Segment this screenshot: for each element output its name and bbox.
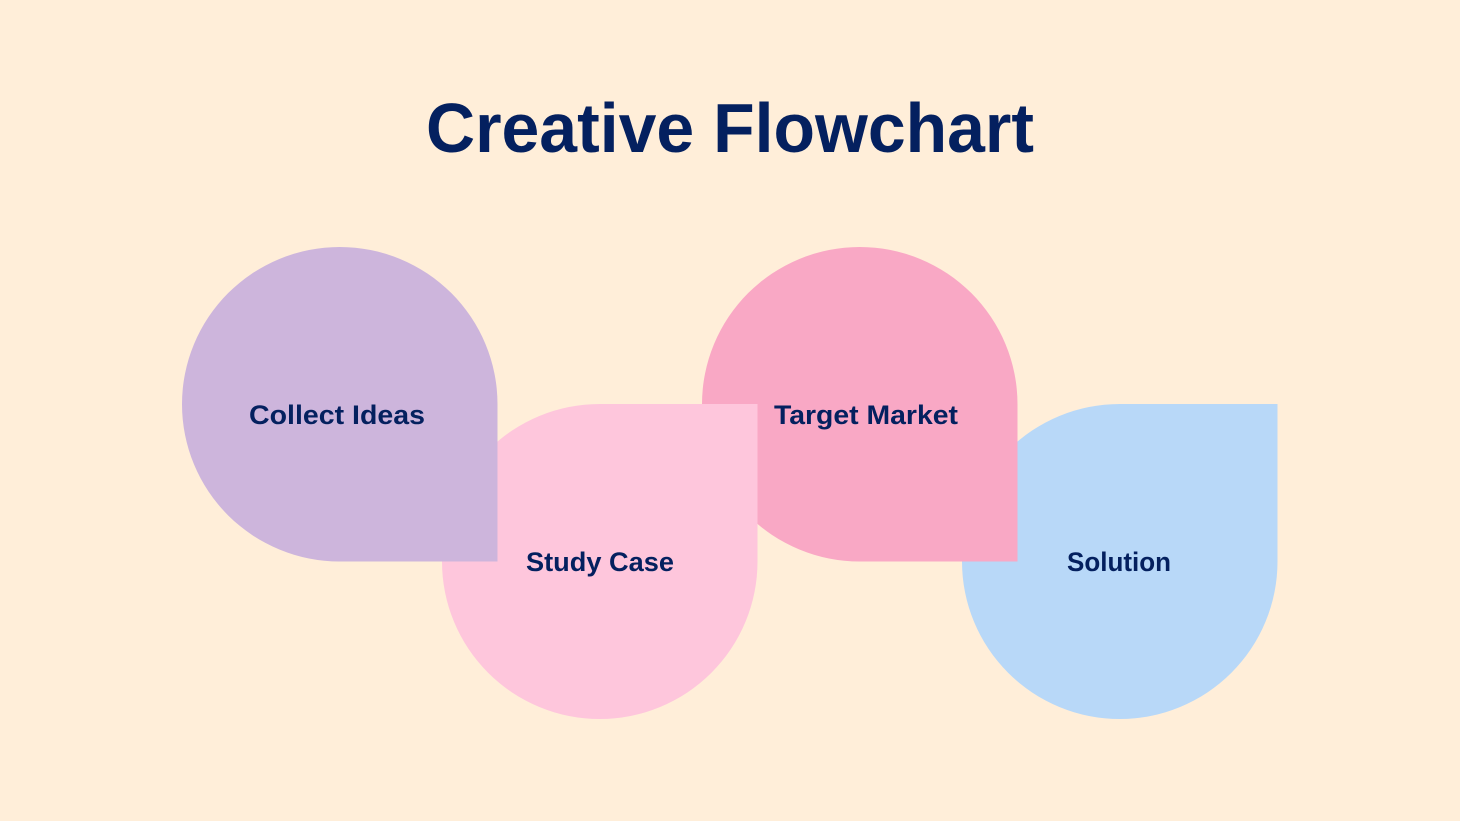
label: Solution: Solution (1067, 547, 1171, 577)
title: Creative Flowchart (426, 89, 1034, 167)
flowchart step shape: Target Market (702, 247, 1018, 562)
label: Target Market: Target Market (774, 400, 958, 430)
flowchart step shape: Study Case (442, 404, 758, 719)
label: Study Case: Study Case (526, 547, 674, 577)
flowchart step shape: Solution (962, 404, 1278, 719)
flowchart step shape: Collect Ideas (182, 247, 498, 562)
label: Collect Ideas: Collect Ideas (249, 400, 425, 430)
